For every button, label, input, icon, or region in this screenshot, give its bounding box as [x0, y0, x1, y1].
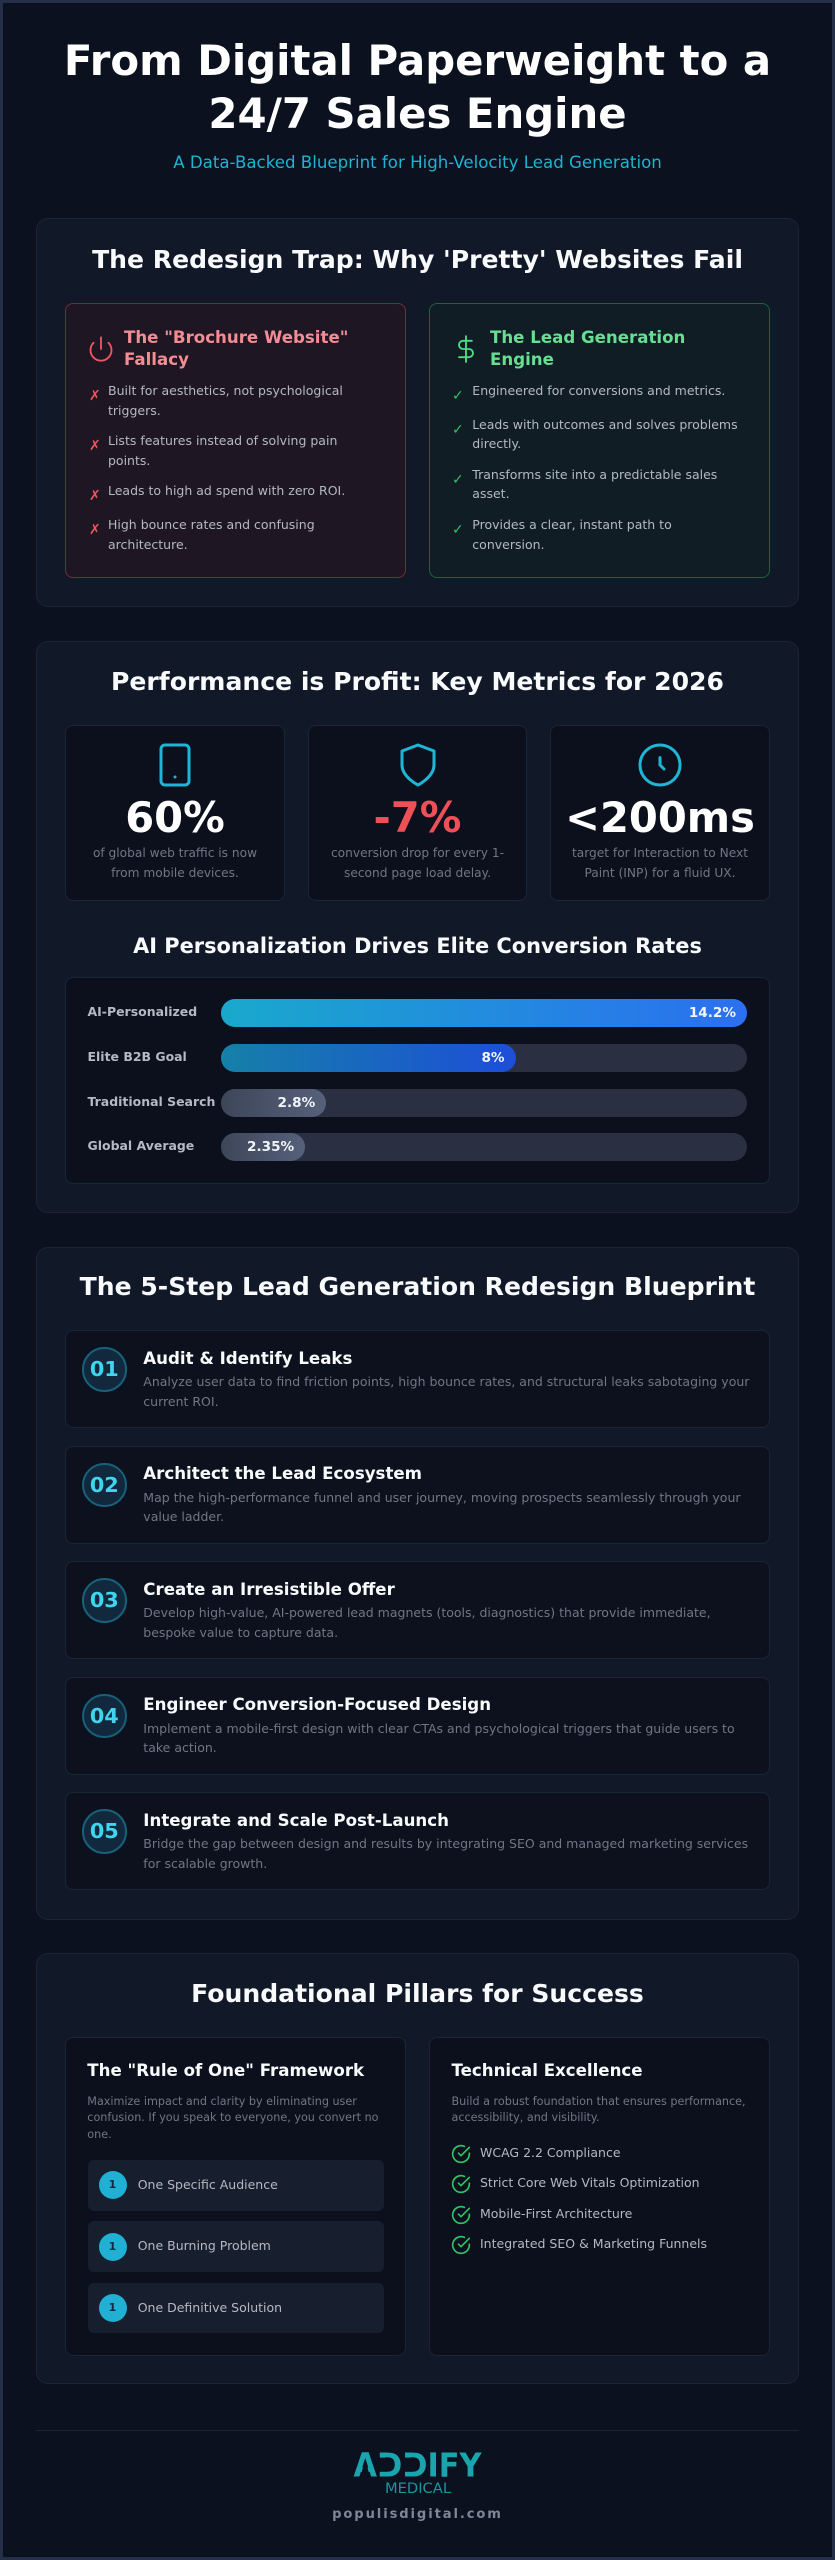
logo: Addify Medical: MEDICAL	[385, 2481, 451, 2497]
bar label: Global Average: Global Average	[88, 1138, 194, 1153]
description: Paint (INP) for a fluid UX.	[584, 866, 736, 880]
list: brochure website fallacy: High bounce rates and confusing	[108, 517, 315, 532]
panel: brochure website fallacy	[65, 303, 406, 578]
list: brochure website fallacy: ✗	[89, 438, 101, 454]
bar label: Elite B2B Goal: Elite B2B Goal	[88, 1049, 187, 1064]
step description 05: for scalable growth.	[143, 1856, 267, 1871]
list: lead generation engine: Leads with outcomes and solves problems	[472, 416, 738, 432]
list: lead generation engine	[452, 383, 738, 552]
text: rule of one description: confusion. If you speak to everyone, you convert no	[87, 2111, 379, 2124]
icon: check 1	[452, 2144, 470, 2164]
icon: check 2	[452, 2174, 470, 2194]
list: lead generation engine: Transforms site into a predictable sales	[472, 466, 717, 482]
list: lead generation engine: conversion.	[472, 537, 544, 552]
step number 04	[82, 1694, 127, 1738]
step number 01: 01	[90, 1357, 119, 1381]
logo: Addify Medical: ADDIFY	[354, 2446, 483, 2485]
heading: lead generation engine: Engine	[490, 350, 554, 369]
description	[93, 846, 257, 880]
bar chart: conversion rates	[65, 976, 770, 1184]
metric card: INP target	[550, 725, 770, 901]
step description 01: current ROI.	[143, 1394, 219, 1409]
panel: technical excellence	[429, 2037, 770, 2356]
text: rule of one description: one.	[87, 2128, 112, 2141]
list: brochure website fallacy: ✗	[89, 488, 101, 504]
step title 05: Integrate and Scale Post-Launch	[143, 1810, 449, 1830]
heading: brochure website fallacy: Fallacy	[124, 350, 189, 369]
item: one definitive solution: 1	[109, 2301, 116, 2314]
title: From Digital Paperweight to a	[64, 36, 771, 84]
step number 03: 03	[90, 1588, 119, 1612]
step description 03: bespoke value to capture data.	[143, 1625, 338, 1640]
bar label: AI-Personalized: AI-Personalized	[88, 1004, 197, 1019]
heading: lead generation engine	[490, 328, 685, 369]
bar: Elite B2B Goal: 8%	[481, 1050, 505, 1066]
description: of global web traffic is now	[93, 846, 257, 860]
item: one specific audience: 1	[109, 2178, 116, 2191]
step 02	[65, 1446, 770, 1544]
list: brochure website fallacy: Leads to high ad spend with zero ROI.	[108, 483, 345, 498]
step number 02: 02	[90, 1473, 119, 1497]
metric card: load delay	[308, 725, 527, 901]
step title 02: Architect the Lead Ecosystem	[143, 1464, 422, 1483]
panel: foundational pillars	[36, 1953, 799, 2384]
step 05	[65, 1792, 770, 1890]
step description 05	[143, 1836, 748, 1871]
item: one definitive solution: One Definitive Solution	[138, 2300, 282, 2315]
bar: AI-Personalized: 14.2%	[689, 1005, 736, 1021]
step description 01	[143, 1374, 750, 1409]
value: -7%: -7%	[374, 793, 461, 842]
step number 04: 04	[90, 1704, 119, 1728]
list: lead generation engine: asset.	[472, 486, 510, 501]
step number 05: 05	[90, 1819, 119, 1843]
list: lead generation engine: Engineered for conversions and metrics.	[472, 383, 725, 398]
list: brochure website fallacy: architecture.	[108, 537, 188, 552]
panel: key metrics	[36, 640, 799, 1212]
list: brochure website fallacy: ✗	[89, 522, 101, 538]
description: target for Interaction to Next	[572, 846, 748, 860]
heading: lead generation engine: The Lead Generation	[490, 328, 685, 346]
item: one specific audience	[88, 2160, 384, 2211]
bar: Global Average: 2.35%	[247, 1139, 294, 1155]
text: technical excellence description	[452, 2095, 746, 2124]
title: 24/7 Sales Engine	[208, 88, 627, 138]
icon: check 4	[452, 2236, 470, 2254]
icon: dollar	[458, 335, 474, 363]
heading: foundational pillars: Foundational Pillars for Success	[191, 1979, 644, 2008]
description: from mobile devices.	[111, 866, 239, 880]
heading: 5-step blueprint: The 5-Step Lead Generation Redesign Blueprint	[80, 1272, 755, 1301]
check item 2: Strict Core Web Vitals Optimization	[480, 2175, 700, 2190]
value: 60%: 60%	[125, 793, 225, 842]
step 04	[65, 1677, 770, 1775]
list: lead generation engine: ✓	[452, 422, 464, 438]
description: second page load delay.	[344, 866, 491, 880]
list: lead generation engine: ✓	[452, 388, 464, 404]
item: one burning problem: One Burning Problem	[138, 2238, 271, 2253]
step title 01: Audit & Identify Leaks	[143, 1348, 352, 1368]
metric card: mobile traffic	[65, 725, 284, 901]
step 01	[65, 1330, 770, 1428]
step number 01	[82, 1347, 127, 1392]
check item 4: Integrated SEO & Marketing Funnels	[480, 2236, 707, 2251]
text: rule of one description	[87, 2095, 379, 2141]
item: one burning problem: 1	[109, 2240, 116, 2253]
check item 1: WCAG 2.2 Compliance	[480, 2145, 621, 2160]
subheading: AI personalization: AI Personalization Drives Elite Conversion Rates	[133, 934, 702, 958]
panel: lead generation engine	[429, 303, 770, 578]
list: lead generation engine: directly.	[472, 436, 521, 451]
step description 05: Bridge the gap between design and results by integrating SEO and managed marketing services	[143, 1836, 748, 1851]
step description 02: Map the high-performance funnel and user journey, moving prospects seamlessly through your	[143, 1490, 741, 1504]
icon: shield	[400, 744, 436, 786]
heading: key metrics: Performance is Profit: Key Metrics for 2026	[111, 667, 724, 696]
step description 03: Develop high-value, AI-powered lead magnets (tools, diagnostics) that provide immediate,	[143, 1605, 711, 1620]
list: brochure website fallacy: Built for aesthetics, not psychological	[108, 383, 343, 398]
icon: smartphone	[160, 744, 190, 786]
item: one definitive solution	[88, 2283, 384, 2333]
step 03	[65, 1561, 770, 1659]
icon: check 3	[452, 2206, 470, 2224]
text: technical excellence description: accessibility, and visibility.	[452, 2111, 600, 2124]
step description 04: take action.	[143, 1740, 217, 1755]
value: <200ms: <200ms	[565, 793, 755, 842]
text: technical excellence description: Build a robust foundation that ensures performance,	[452, 2095, 746, 2108]
list: brochure website fallacy: triggers.	[108, 403, 161, 418]
panel: 5-step blueprint	[36, 1246, 799, 1920]
list: lead generation engine: Provides a clear, instant path to	[472, 517, 672, 532]
step description 02: value ladder.	[143, 1509, 224, 1524]
item: one burning problem	[88, 2221, 384, 2272]
heading: rule of one: The "Rule of One" Framework	[87, 2060, 364, 2080]
list: lead generation engine: ✓	[452, 522, 464, 538]
subtitle: A Data-Backed Blueprint for High-Velocity Lead Generation	[173, 153, 662, 172]
footer url: populisdigital.com	[332, 2507, 503, 2522]
bar: Traditional Search	[221, 1089, 747, 1117]
description	[572, 846, 748, 880]
heading: brochure website fallacy	[124, 328, 348, 369]
text: rule of one description: Maximize impact and clarity by eliminating user	[87, 2095, 357, 2108]
step number 05	[82, 1809, 127, 1854]
check item 3: Mobile-First Architecture	[480, 2206, 632, 2221]
step description 01: Analyze user data to find friction points, high bounce rates, and structural leaks sabotaging your	[143, 1374, 749, 1389]
panel: the redesign trap	[36, 218, 799, 607]
step description 04: Implement a mobile-first design with clear CTAs and psychological triggers that guide users to	[143, 1720, 735, 1736]
bar: Global Average	[221, 1133, 747, 1161]
item: one specific audience: One Specific Audience	[138, 2177, 278, 2192]
panel: rule of one	[65, 2037, 406, 2356]
bar: Traditional Search: 2.8%	[277, 1095, 315, 1111]
step description 02	[143, 1490, 741, 1524]
list: brochure website fallacy: ✗	[89, 388, 101, 404]
heading: technical excellence: Technical Excellence	[452, 2060, 643, 2080]
step description 04	[143, 1720, 735, 1755]
heading: brochure website fallacy: The "Brochure Website"	[124, 328, 348, 346]
step title 04: Engineer Conversion-Focused Design	[143, 1695, 491, 1714]
step description 03	[143, 1605, 711, 1640]
bar: AI-Personalized	[221, 999, 747, 1027]
description: conversion drop for every 1-	[331, 846, 504, 860]
step title 03: Create an Irresistible Offer	[143, 1580, 395, 1598]
list: brochure website fallacy: Lists features instead of solving pain	[108, 433, 337, 448]
step number 02	[82, 1463, 127, 1507]
icon: clock	[638, 744, 682, 786]
heading: the redesign trap: The Redesign Trap: Why 'Pretty' Websites Fail	[92, 245, 743, 274]
list: brochure website fallacy: points.	[108, 453, 150, 468]
list: lead generation engine: ✓	[452, 472, 464, 488]
list: brochure website fallacy	[89, 383, 345, 552]
bar label: Traditional Search: Traditional Search	[88, 1094, 215, 1108]
step number 03	[82, 1578, 127, 1623]
description	[331, 846, 504, 880]
bar: Elite B2B Goal	[221, 1044, 747, 1072]
icon: power	[90, 336, 112, 362]
title	[64, 36, 771, 138]
